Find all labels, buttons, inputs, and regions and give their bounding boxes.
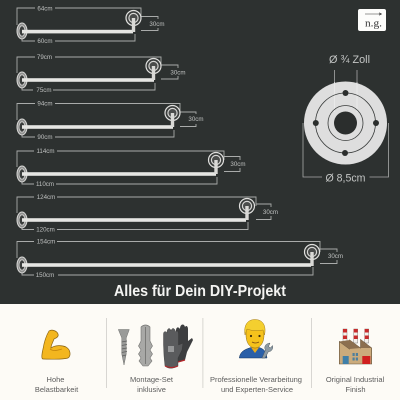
caption: strength (35, 375, 79, 394)
caption: mounting set (130, 375, 174, 394)
logo badge (358, 9, 386, 31)
caption: finish: Finish (345, 385, 366, 394)
icon: work gloves (164, 325, 193, 368)
label: pipe diameter: Ø ¾ Zoll (329, 54, 370, 66)
caption: mounting set: Montage-Set (130, 375, 174, 384)
caption: service: Professionelle Verarbeitung (210, 375, 302, 384)
logo badge: n.g. (365, 18, 382, 30)
rail 94cm / 90cm: 94cm (37, 100, 53, 108)
caption: mounting set: inklusive (137, 385, 166, 394)
bottom panel (0, 304, 400, 400)
caption: strength: Belastbarkeit (35, 385, 79, 394)
rail 154cm / 150cm (17, 238, 343, 279)
rail 114cm / 110cm: 110cm (36, 181, 54, 188)
rail 64cm / 60cm (17, 6, 165, 45)
rail 124cm / 120cm: 124cm (37, 194, 55, 201)
caption: finish (326, 375, 385, 394)
rail 154cm / 150cm: 30cm (328, 253, 343, 260)
rail 94cm / 90cm: 30cm (188, 116, 204, 123)
caption: service: und Experten-Service (221, 385, 293, 394)
icon: mechanic (239, 320, 273, 358)
rail 154cm / 150cm: 150cm (36, 272, 54, 279)
rail 94cm / 90cm: 90cm (37, 134, 53, 141)
back glove (172, 325, 193, 362)
rail 114cm / 110cm: 30cm (230, 161, 246, 168)
rail 114cm / 110cm: 114cm (36, 148, 55, 155)
rail 79cm / 75cm (17, 54, 186, 94)
icon: wall plug (138, 325, 152, 366)
caption: strength: Hohe (47, 375, 64, 384)
rail 79cm / 75cm: 79cm (37, 54, 52, 61)
icon: factory (339, 329, 372, 364)
rail 124cm / 120cm (17, 194, 278, 234)
icon: flexed biceps (42, 330, 70, 359)
rail 94cm / 90cm (17, 100, 204, 141)
flange diagram (303, 54, 388, 184)
rail 154cm / 150cm: 154cm (37, 238, 55, 246)
rail 114cm / 110cm (17, 148, 246, 188)
rail 64cm / 60cm: 60cm (37, 38, 53, 45)
label: outer diameter: Ø 8,5cm (326, 172, 366, 184)
title: Alles für Dein DIY-Projekt (114, 283, 286, 300)
background (0, 0, 400, 304)
caption: service (210, 375, 302, 394)
rail 124cm / 120cm: 120cm (36, 226, 55, 234)
caption: finish: Original Industrial (326, 375, 385, 384)
rail 124cm / 120cm: 30cm (263, 209, 278, 216)
rail 79cm / 75cm: 75cm (36, 87, 52, 94)
rail 79cm / 75cm: 30cm (170, 70, 186, 76)
rail 64cm / 60cm: 30cm (149, 21, 165, 28)
rail 64cm / 60cm: 64cm (37, 6, 53, 12)
icon: screw (118, 330, 129, 365)
front glove (164, 328, 183, 368)
